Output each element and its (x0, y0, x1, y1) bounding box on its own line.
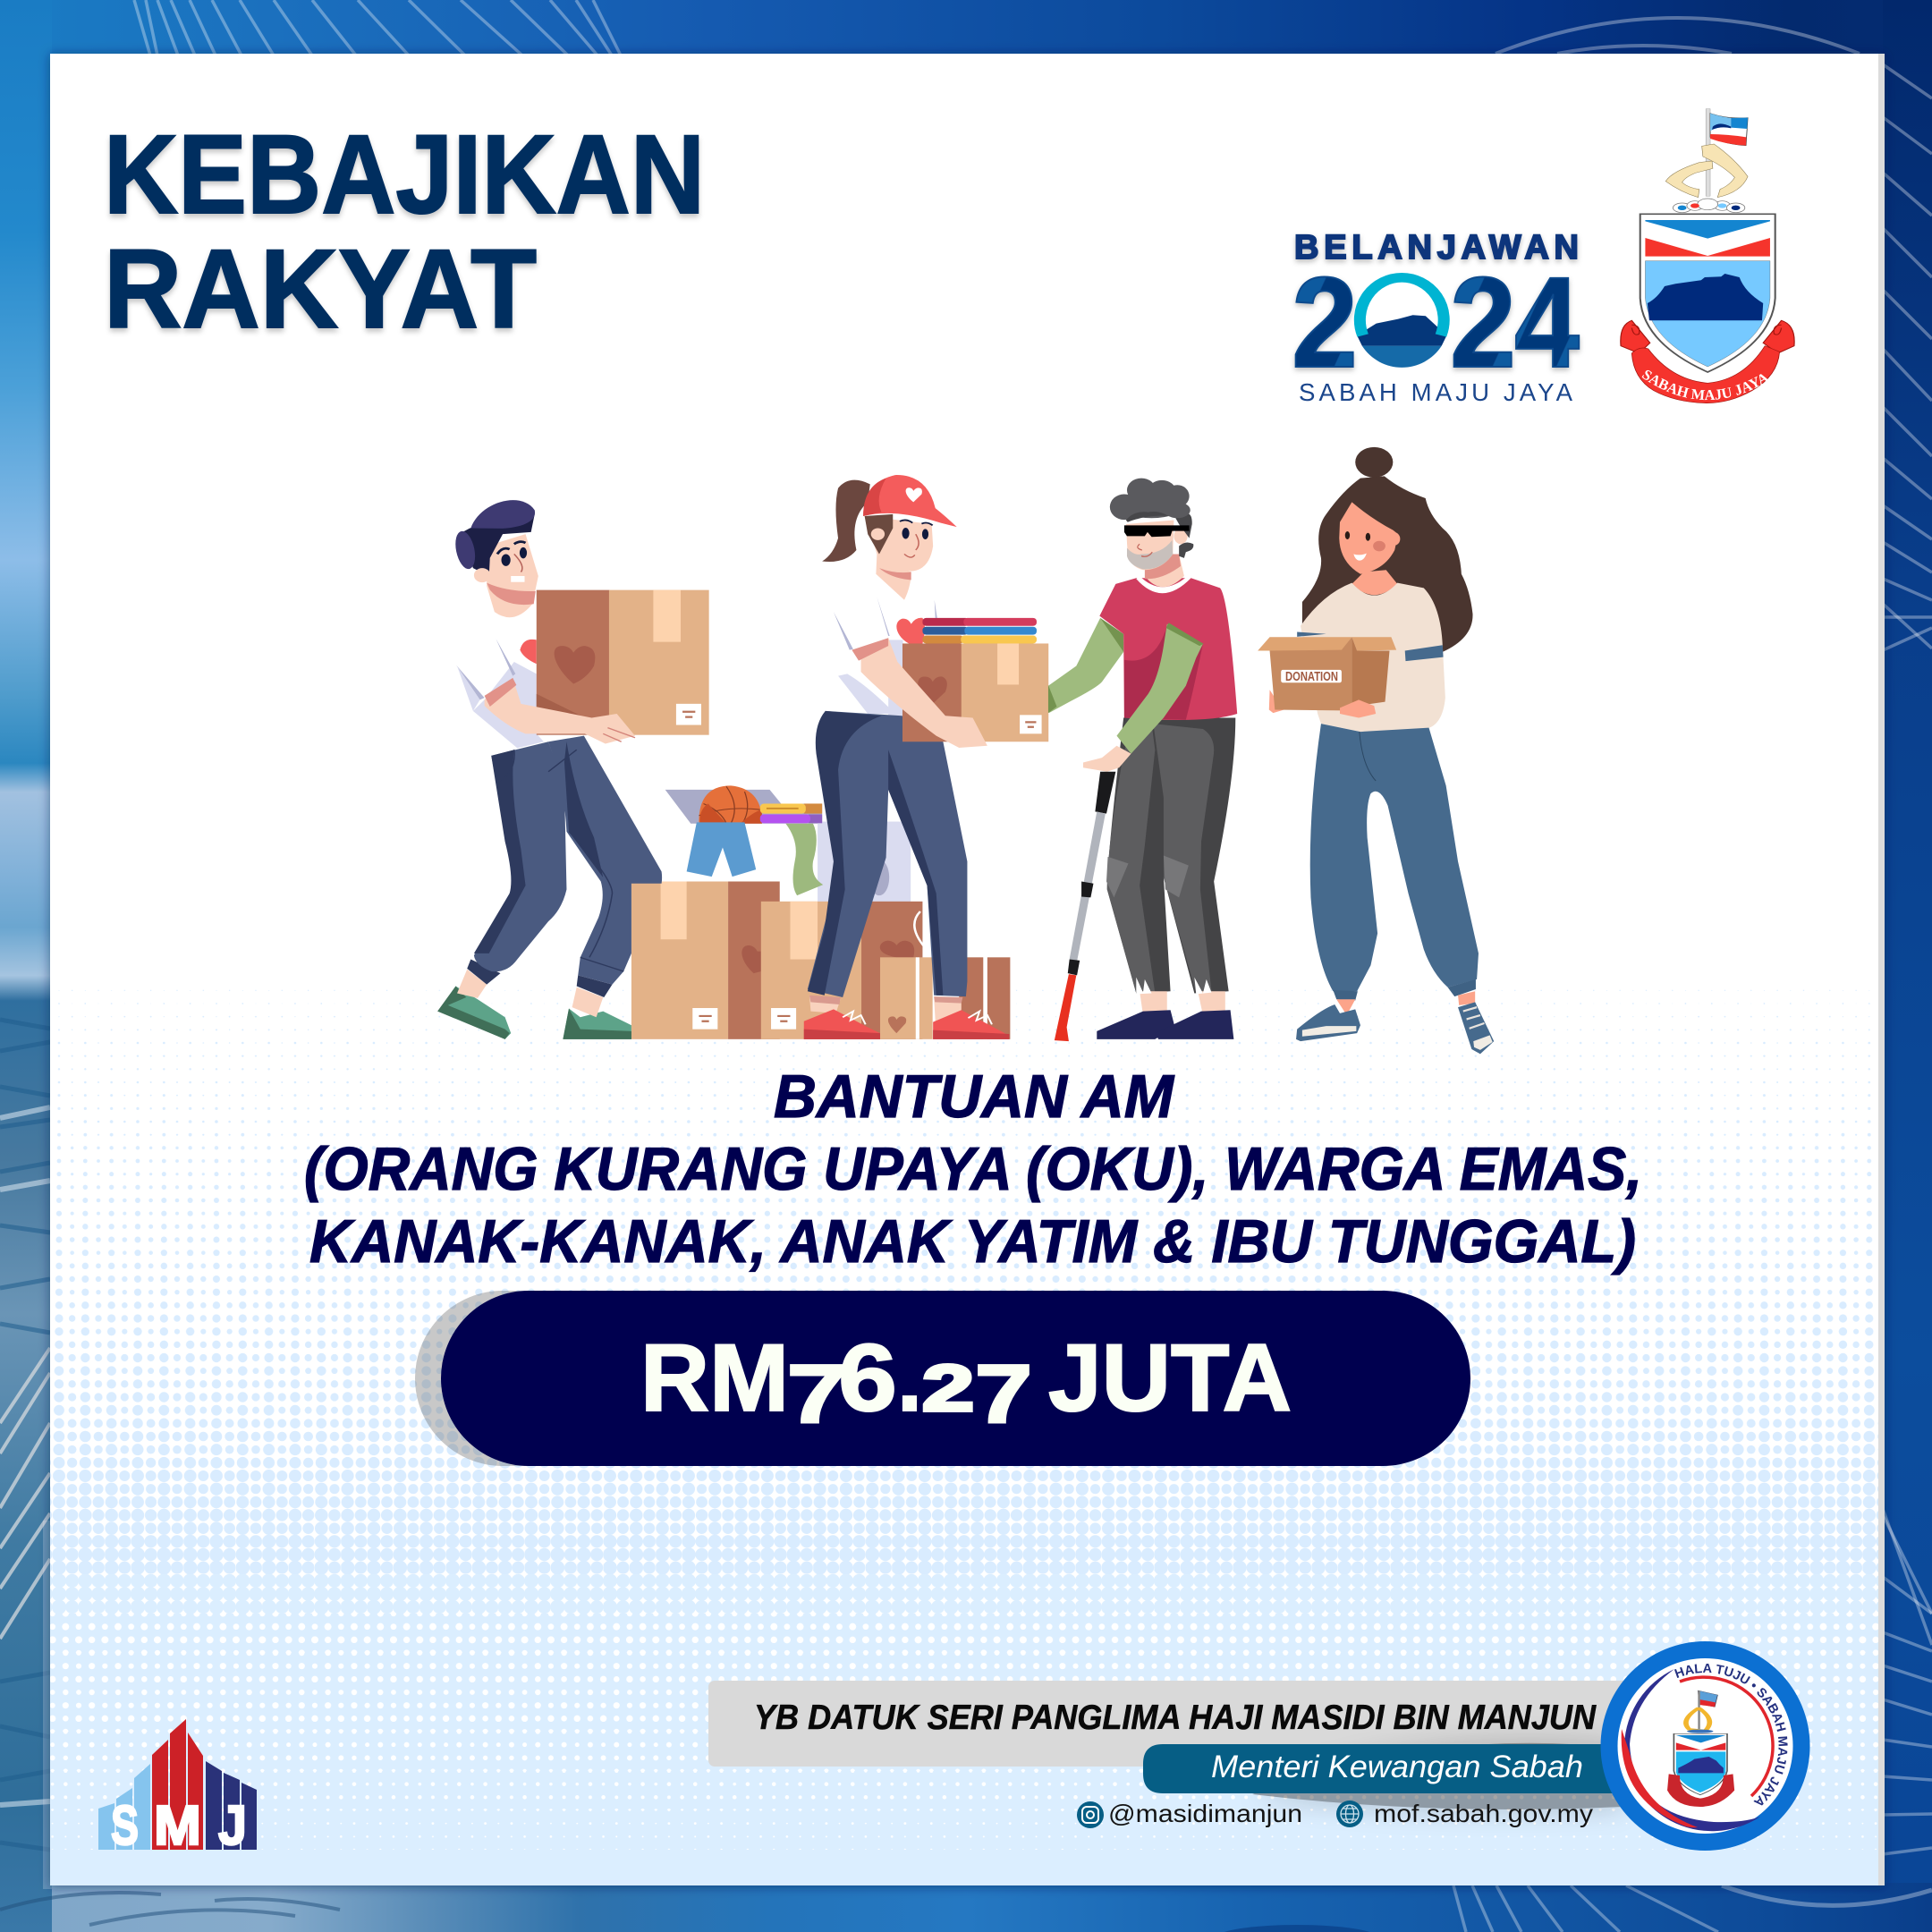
woman with donation box (1258, 447, 1494, 1054)
title: KEBAJIKAN (104, 113, 705, 237)
amount text (640, 1324, 1292, 1440)
amount text: 6 (838, 1324, 897, 1431)
amount text: 7 (787, 1349, 846, 1440)
illustration: volunteers and recipients (437, 447, 1494, 1054)
large box held by man (485, 590, 709, 743)
stacked donation boxes (631, 785, 1010, 1039)
man carrying box (437, 500, 662, 1039)
minister name bar: YB DATUK SERI PANGLIMA HAJI MASIDI BIN MANJUN (754, 1699, 1597, 1737)
blind man and woman with donation box (1048, 447, 1494, 1054)
social handle: Instagram: @masidimanjun (1108, 1800, 1302, 1827)
donation box label: DONATION (1285, 670, 1338, 684)
minister title bar: Menteri Kewangan Sabah (1211, 1750, 1583, 1784)
logo: SMJ: M (154, 1795, 201, 1857)
amount text: RM (640, 1324, 789, 1431)
amount text: 7 (975, 1349, 1032, 1440)
amount text: 2 (922, 1352, 974, 1425)
woman carrying box (804, 475, 1048, 1039)
badge: Hala Tuju Sabah Maju Jaya (1601, 1641, 1810, 1851)
badge: Hala Tuju Sabah Maju Jaya: HALA TUJU • SABAH MAJU JAYA (1674, 1664, 1788, 1805)
subtitle text: KANAK-KANAK, ANAK YATIM & IBU TUNGGAL) (309, 1208, 1636, 1275)
subtitle text (304, 1063, 1642, 1275)
minister name bar (708, 1681, 1630, 1767)
amount text: JUTA (1048, 1324, 1292, 1431)
amount pill (415, 1291, 1470, 1466)
logo: Belanjawan 2024: 2 (1292, 250, 1358, 394)
logo: Sabah coat of arms (1620, 109, 1795, 403)
badge mini crest (1667, 1690, 1734, 1807)
logo: Belanjawan 2024: 4 (1514, 250, 1580, 394)
logo: SMJ (98, 1719, 257, 1857)
subtitle text: BANTUAN AM (774, 1063, 1174, 1131)
subtitle text: (ORANG KURANG UPAYA (OKU), WARGA EMAS, (304, 1135, 1642, 1203)
logo: Belanjawan 2024: 2 (1450, 250, 1516, 394)
blind man with cane (1048, 479, 1237, 1041)
logo: Belanjawan 2024: SABAH MAJU JAYA (1299, 378, 1573, 406)
logo: Belanjawan 2024 (1292, 229, 1580, 406)
logo: Belanjawan 2024: BELANJAWAN (1294, 229, 1579, 267)
website link: mof.sabah.gov.my (1374, 1800, 1593, 1827)
title: RAKYAT (104, 227, 537, 352)
minister title bar (1143, 1743, 1628, 1809)
logo: SMJ: J (218, 1795, 247, 1857)
amount text: . (897, 1324, 922, 1431)
logo: Sabah coat of arms: SABAH MAJU JAYA (1642, 370, 1767, 401)
logo: SMJ: S (111, 1795, 139, 1857)
man and woman volunteers with boxes (437, 475, 1048, 1039)
title (104, 113, 705, 352)
